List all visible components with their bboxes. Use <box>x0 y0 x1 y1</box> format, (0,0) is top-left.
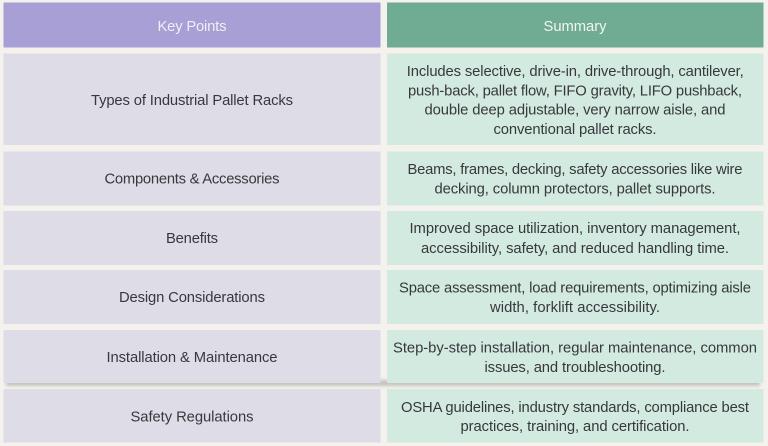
row 3 summary <box>387 211 764 265</box>
row shadow <box>6 380 760 386</box>
row 5 key point: Installation & Maintenance <box>106 350 278 366</box>
row 1 summary: double deep adjustable, very narrow aisle, and <box>424 102 726 118</box>
row 6 summary <box>387 389 764 442</box>
row 3 summary: Improved space utilization, inventory management, <box>410 221 740 237</box>
row 3 summary: accessibility, safety, and reduced handling time. <box>421 241 729 257</box>
row 5 summary: Step-by-step installation, regular maintenance, common <box>393 340 757 356</box>
row 5 summary: issues, and troubleshooting. <box>484 360 666 376</box>
row 1 key point <box>4 54 380 145</box>
row 2 summary: decking, column protectors, pallet supports. <box>434 182 716 198</box>
row 5 key point <box>4 330 380 383</box>
header: Key Points <box>4 2 380 48</box>
row 6 summary: OSHA guidelines, industry standards, compliance best <box>401 400 749 416</box>
row 2 key point <box>4 152 380 206</box>
row 4 summary <box>387 270 764 324</box>
row 4 summary: width, forklift accessibility. <box>489 300 660 316</box>
row 4 key point <box>4 270 380 324</box>
row 5 summary <box>387 330 764 383</box>
header: Key Points: Key Points <box>158 19 226 35</box>
row 4 key point: Design Considerations <box>119 290 265 306</box>
row 3 key point <box>4 211 380 265</box>
row 1 summary: push-back, pallet flow, FIFO gravity, LIFO pushback, <box>408 84 742 100</box>
row 1 summary: Includes selective, drive-in, drive-through, cantilever, <box>407 64 744 80</box>
row 1 key point: Types of Industrial Pallet Racks <box>91 93 293 109</box>
row 3 key point: Benefits <box>166 231 218 247</box>
row 2 key point: Components & Accessories <box>104 172 280 188</box>
row 1 summary: conventional pallet racks. <box>494 122 656 138</box>
row 6 summary: practices, training, and certification. <box>460 419 690 435</box>
header: Summary: Summary <box>544 19 607 35</box>
row 2 summary: Beams, frames, decking, safety accessories like wire <box>408 162 742 178</box>
header: Summary <box>387 2 764 48</box>
row 2 summary <box>387 152 764 206</box>
row 6 key point: Safety Regulations <box>130 410 254 426</box>
row 4 summary: Space assessment, load requirements, optimizing aisle <box>399 280 751 296</box>
row 1 summary <box>387 54 764 145</box>
row 6 key point <box>4 389 380 442</box>
